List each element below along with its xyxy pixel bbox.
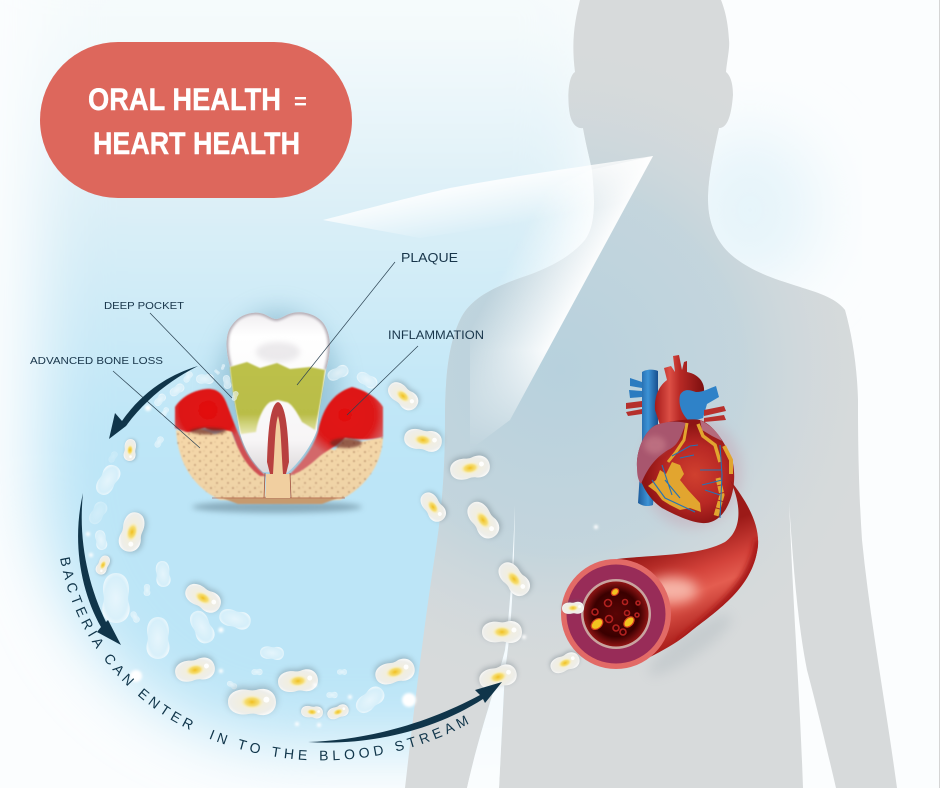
- arrow: to artery: [308, 682, 502, 743]
- human body silhouette: [405, 0, 897, 788]
- title pill: =: [294, 89, 307, 114]
- arrow: left side downward: [78, 493, 121, 645]
- page fold zoom wedge: [323, 156, 653, 450]
- tooth and gum illustration: [175, 310, 383, 513]
- heart: [626, 355, 742, 528]
- coronary fat: [648, 462, 701, 512]
- leader lines: [113, 262, 418, 448]
- pulmonary artery: [679, 386, 719, 422]
- coronary veins: [652, 445, 722, 518]
- labels: DEEP POCKET: [104, 300, 185, 312]
- artery opening: [561, 559, 671, 669]
- heart body: [637, 419, 734, 523]
- labels: INFLAMMATION: [388, 328, 484, 342]
- title pill: [40, 42, 352, 198]
- bacteria trail: [86, 363, 598, 727]
- root pulp: [267, 402, 289, 474]
- bone: [176, 428, 383, 500]
- crown and roots: [226, 312, 330, 473]
- labels: PLAQUE: [401, 250, 458, 265]
- left vessels: [629, 378, 642, 398]
- labels: [30, 250, 484, 367]
- gums: [175, 387, 383, 476]
- artery tube: [547, 480, 760, 684]
- labels: ADVANCED BONE LOSS: [30, 355, 163, 367]
- aortic arch: [655, 355, 704, 425]
- curved caption: BACTERIA CAN ENTER IN TO THE BLOOD STREAM: [60, 557, 468, 760]
- plaque: [230, 362, 325, 434]
- arrow: gum to left: [109, 366, 198, 439]
- title pill: ORAL HEALTH: [88, 81, 281, 117]
- title pill: HEART HEALTH: [93, 125, 300, 161]
